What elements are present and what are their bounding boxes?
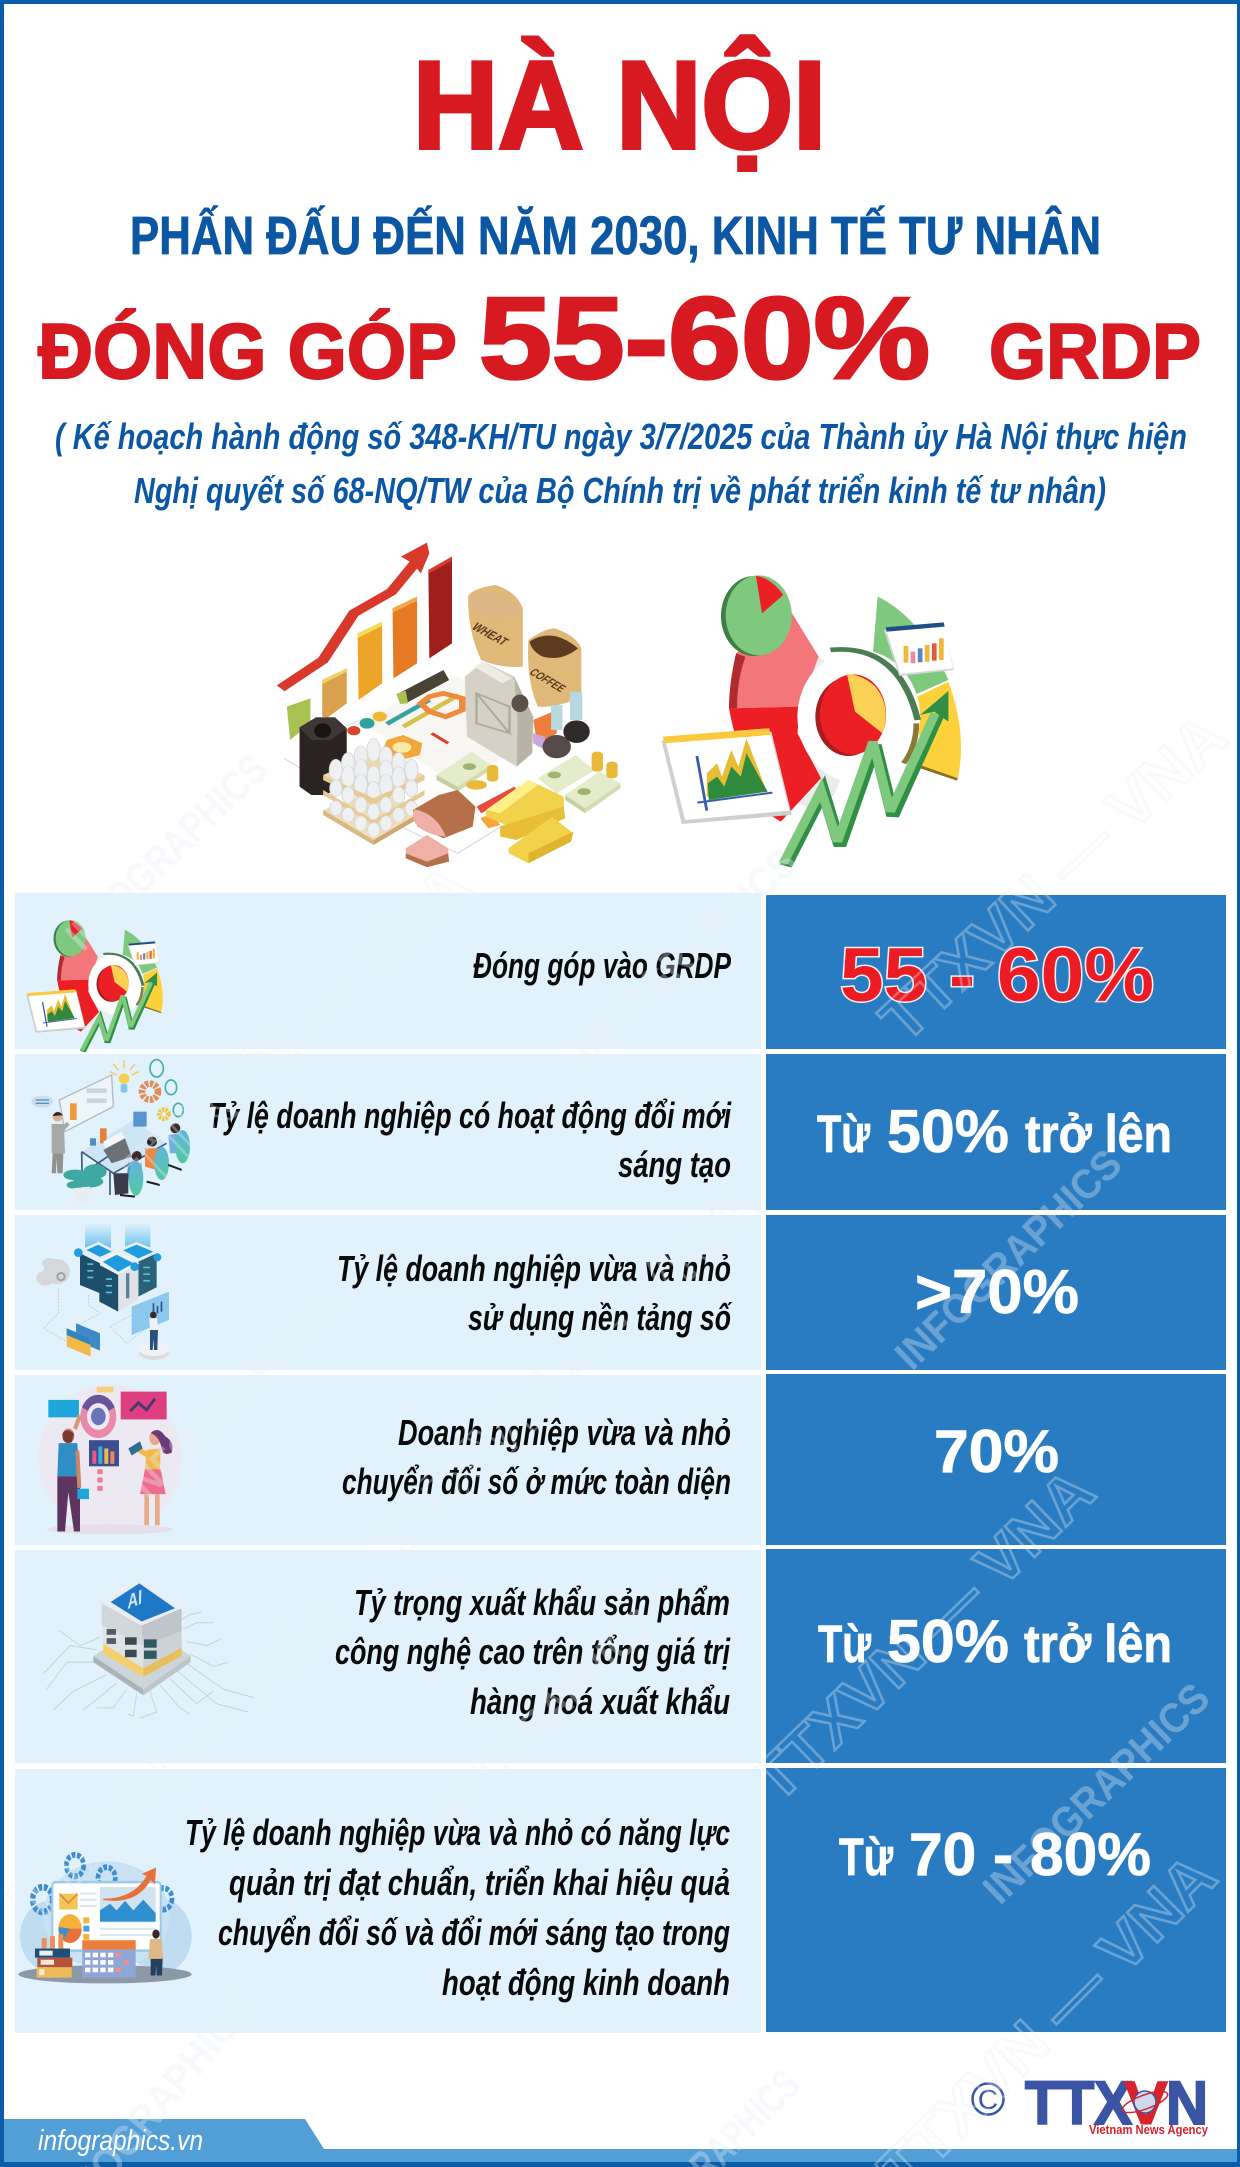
icon: AI chip row 5 [43,1580,253,1718]
headline: contribution: GRDP [989,307,1201,395]
icon: dashboard with gears and calendar row 6 [18,1855,192,1983]
row 5 value [818,1608,1172,1675]
row 3 label: Tỷ lệ doanh nghiệp vừa và nhỏ [337,1248,731,1289]
row 2 label: sáng tạo [618,1144,731,1185]
row 2 value: 50% [887,1098,1009,1165]
footer site name: infographics.vn [38,2125,203,2157]
row 2 value [817,1098,1172,1165]
watermark overlay: TTXVN — VNA [0,1580,361,1935]
illustration: goods and rising bars [281,543,620,867]
icon: team meeting row 2 [31,1060,190,1203]
row 2 label: Tỷ lệ doanh nghiệp có hoạt động đổi mới [208,1095,732,1136]
icon: pie charts row 1 [26,920,163,1052]
row 6 value: Từ [839,1828,893,1887]
title: HÀ NỘI [413,36,826,175]
row 5 label: hàng hoá xuất khẩu [470,1681,730,1722]
logo: TTXVN Vietnam News Agency: V [1124,2069,1168,2137]
logo: TTXVN Vietnam News Agency: TTX [1025,2069,1132,2137]
footer band [0,2119,1240,2167]
row 4 label: chuyển đổi số ở mức toàn diện [342,1461,731,1502]
watermark overlay: TTXVN — VNA [740,1456,1108,1815]
watermark overlay [0,701,1240,2167]
watermark overlay: TTXVN — VNA [867,701,1240,1055]
headline: contribution: ĐÓNG GÓP [38,307,457,395]
row 5 label [335,1582,731,1722]
illustration: pie charts and growth arrow [661,575,961,866]
row 4 label [342,1412,731,1502]
row 4 value: 70% [934,1418,1059,1485]
logo: TTXVN Vietnam News Agency: N [1166,2069,1208,2137]
logo: TTXVN Vietnam News Agency [972,2069,1209,2137]
watermark overlay: INFOGRAPHICS [424,1598,665,1833]
row 5 value: 50% [887,1608,1009,1675]
source note [55,416,1187,511]
panel: left cells background [15,893,761,2033]
illustration: goods and rising bars: COFFEE [526,667,568,695]
icon: two people with dashboards row 4 [38,1384,182,1534]
row 2 label [208,1095,732,1185]
watermark overlay: INFOGRAPHICS [57,745,276,959]
watermark overlay: INFOGRAPHICS [886,1140,1130,1378]
row 5 label: công nghệ cao trên tổng giá trị [335,1631,731,1672]
panel: right value cells background [766,895,1226,2032]
logo: TTXVN Vietnam News Agency: Vietnam News Agency [1089,2122,1209,2137]
row 6 label: chuyển đổi số và đổi mới sáng tạo trong [218,1912,730,1953]
watermark overlay: INFOGRAPHICS [974,1674,1218,1912]
row 4 label: Doanh nghiệp vừa và nhỏ [398,1412,731,1453]
watermark overlay: TTXVN — VNA [112,851,485,1205]
illustration: goods and rising bars: WHEAT [468,621,512,649]
row 3 label: sử dụng nền tảng số [468,1297,732,1338]
row 5 value: Từ [818,1615,871,1674]
watermark overlay: TTXVN — VNA [357,1171,772,1575]
row 6 value: 70 - 80% [909,1821,1151,1888]
logo: TTXVN Vietnam News Agency: C [978,2084,998,2115]
row 1 label: Đóng góp vào GRDP [473,945,732,986]
row 6 label: Tỷ lệ doanh nghiệp vừa và nhỏ có năng lực [185,1812,730,1853]
headline: contribution: 55-60% [479,273,930,403]
row 5 value: trở lên [1024,1615,1172,1674]
row 2 value: trở lên [1025,1105,1172,1164]
row 6 label: hoạt động kinh doanh [442,1962,730,2003]
row 2 value: Từ [817,1105,870,1164]
row 3 value: >70% [915,1258,1079,1327]
row 6 label: quản trị đạt chuẩn, triển khai hiệu quả [229,1862,730,1903]
headline: contribution [38,273,1201,403]
row 1 value: 55 - 60% [840,933,1154,1018]
icon: servers row 3 [36,1223,169,1360]
icon: AI chip row 5: AI [127,1585,142,1614]
watermark overlay: INFOGRAPHICS [562,838,806,1071]
row 3 label [337,1248,732,1338]
watermark overlay: INFOGRAPHICS [114,1282,351,1513]
row 6 label [185,1812,730,2003]
row 5 label: Tỷ trọng xuất khẩu sản phẩm [354,1582,730,1623]
